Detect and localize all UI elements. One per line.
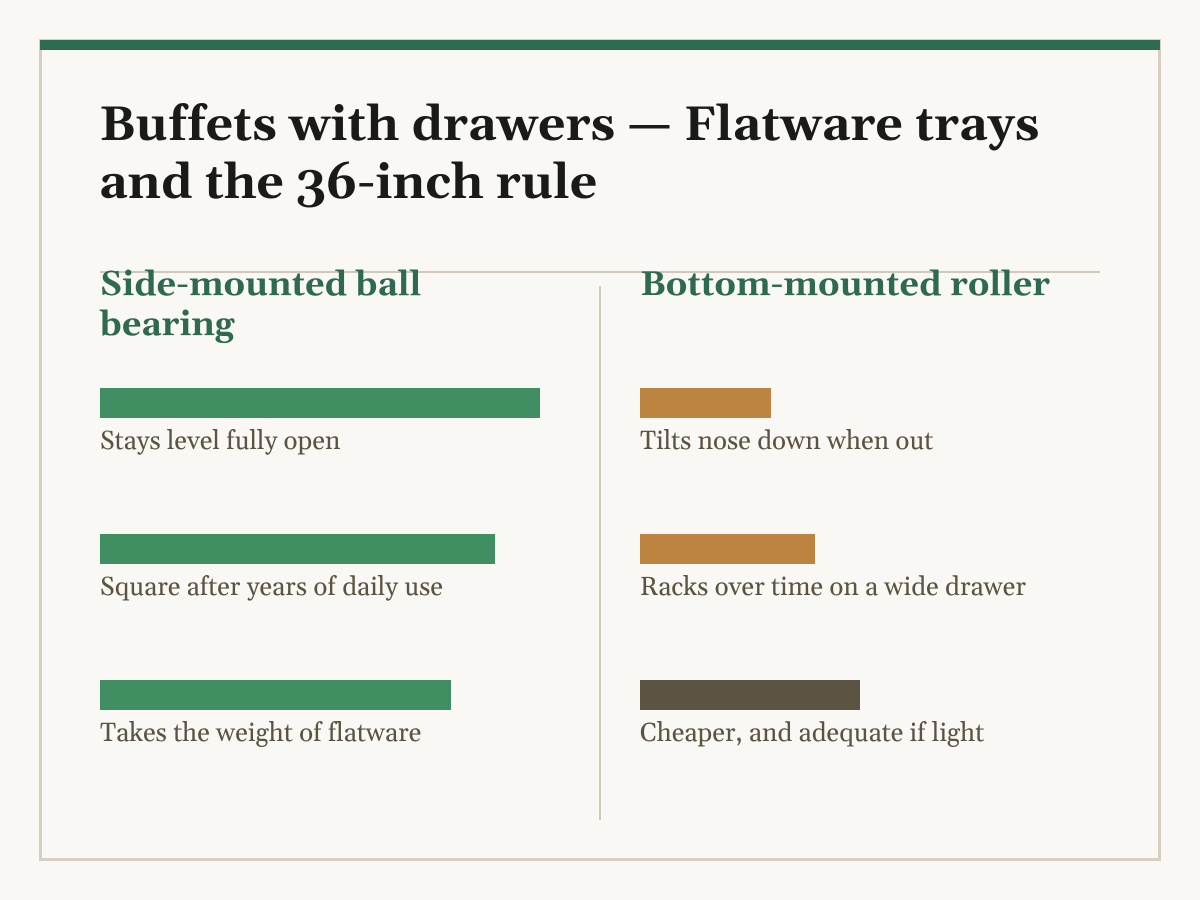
label: Cheaper, and adequate if light: [640, 717, 984, 750]
bar: [640, 388, 771, 418]
label: Tilts nose down when out: [640, 425, 933, 458]
heading: side-mounted ball bearing: Side-mounted ball: [100, 263, 421, 307]
left item 2: [100, 534, 495, 604]
right item 2: [640, 534, 1026, 604]
bar: [640, 680, 860, 710]
heading: side-mounted ball bearing: [100, 263, 421, 347]
label: Racks over time on a wide drawer: [640, 571, 1026, 604]
heading: side-mounted ball bearing: bearing: [100, 303, 234, 347]
bar: [100, 388, 540, 418]
bar: [100, 680, 451, 710]
heading: bottom-mounted roller: Bottom-mounted roller: [640, 263, 1050, 307]
right item 3: [640, 680, 984, 750]
bar: [100, 534, 495, 564]
left item 3: [100, 680, 451, 750]
bar: [640, 534, 815, 564]
label: Stays level fully open: [100, 425, 340, 458]
label: Takes the weight of flatware: [100, 717, 421, 750]
left item 1: [100, 388, 540, 458]
title: Buffets with drawers — Flatware trays: [99, 96, 1039, 157]
title: and the 36-inch rule: [99, 154, 597, 215]
title: [99, 96, 1039, 215]
label: Square after years of daily use: [100, 571, 443, 604]
top accent bar: [40, 40, 1160, 50]
right item 1: [640, 388, 933, 458]
